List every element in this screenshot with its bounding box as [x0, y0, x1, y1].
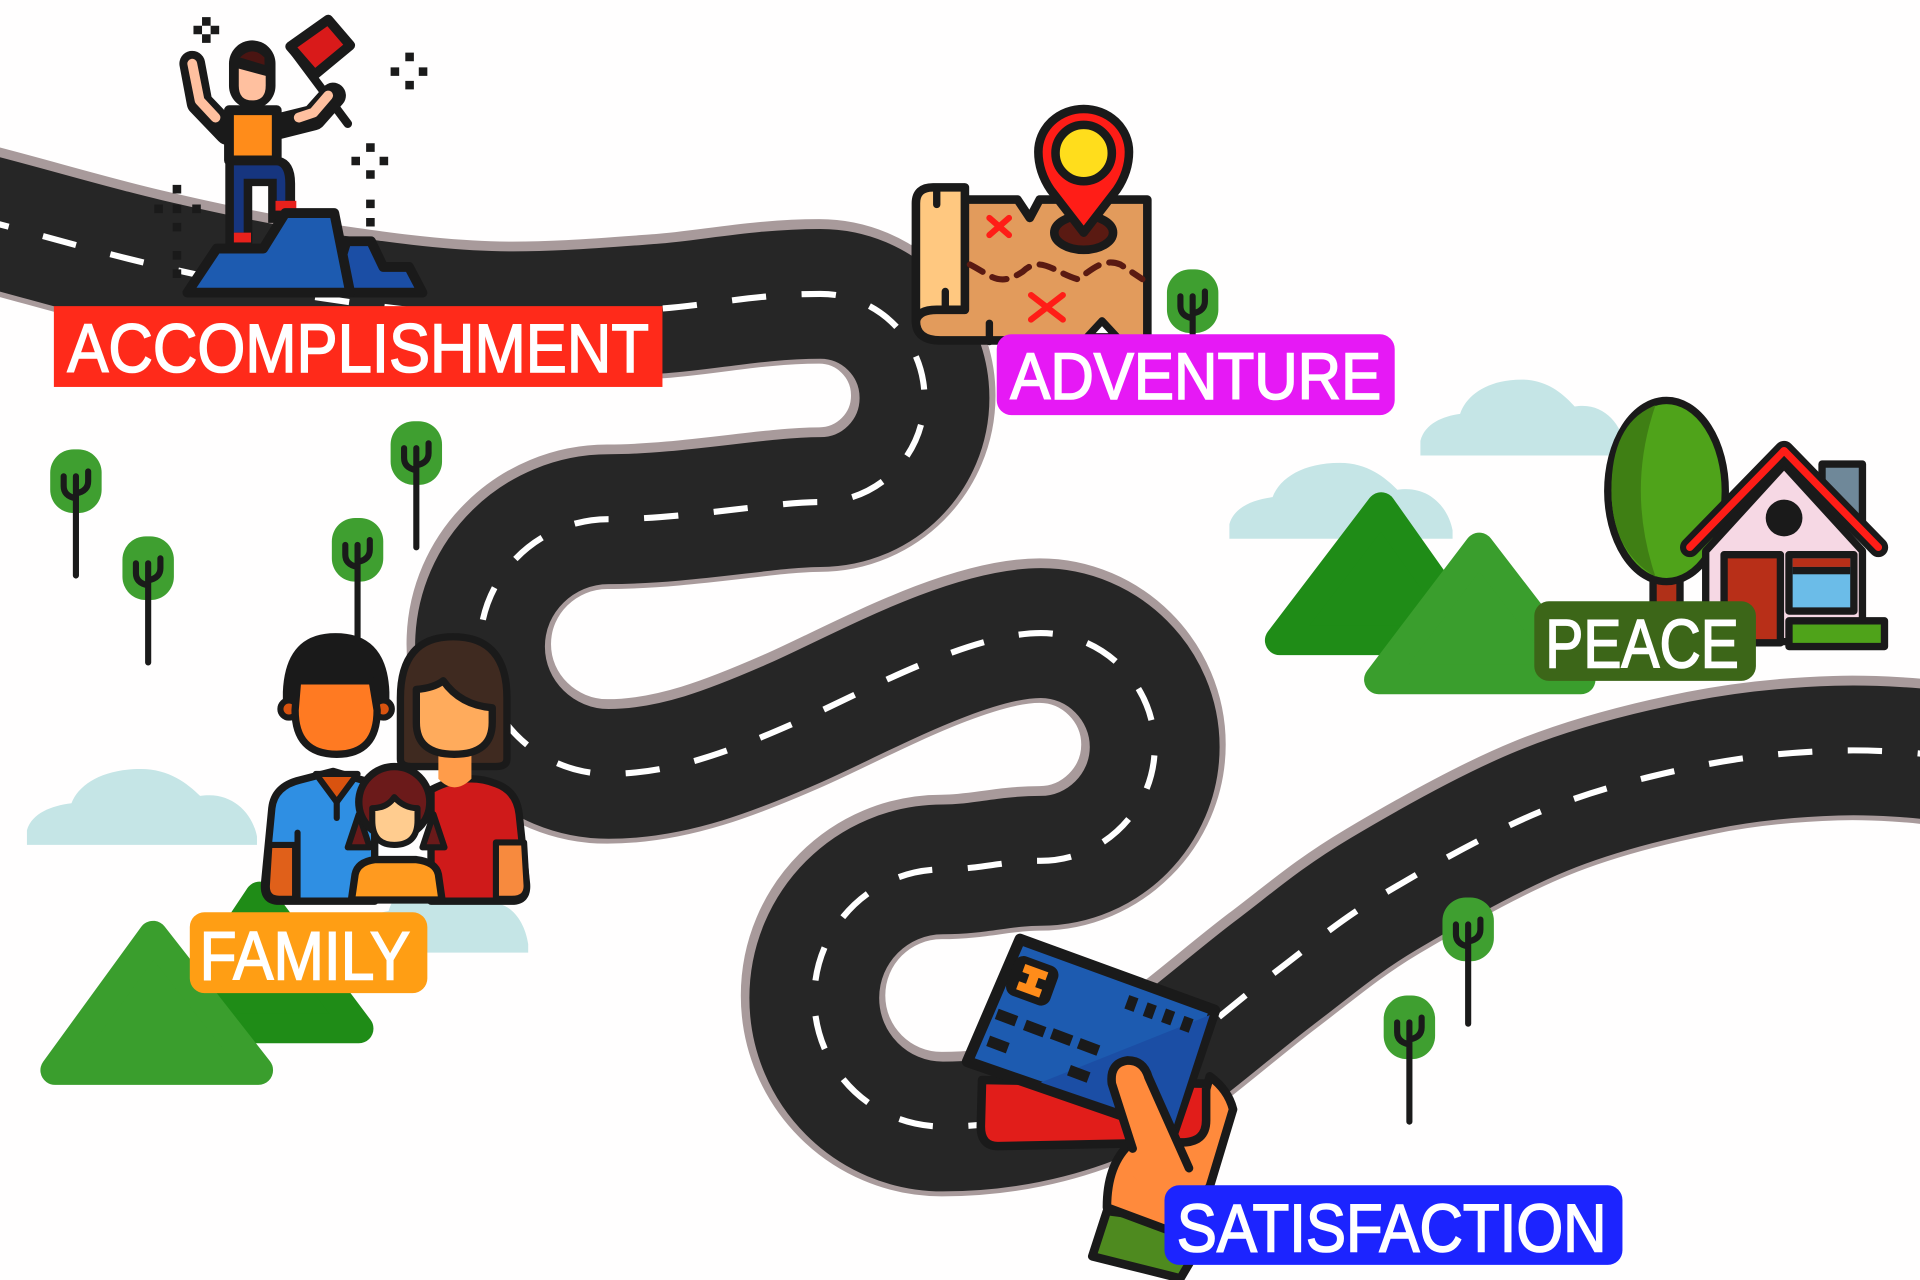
cloud left	[27, 769, 257, 845]
thumb fill	[1112, 1060, 1189, 1206]
flag	[290, 47, 348, 124]
pin base	[1054, 216, 1113, 250]
father collar	[316, 774, 358, 802]
bottom triangle	[1087, 321, 1117, 337]
icon: family of three	[264, 633, 527, 901]
tree 6	[1442, 898, 1494, 1024]
crosses	[989, 218, 1063, 320]
tree 5	[1167, 269, 1218, 396]
tree crown	[1608, 400, 1725, 582]
mountains left	[55, 896, 359, 1070]
dashed trail	[970, 262, 1142, 279]
head	[229, 40, 276, 109]
girl pigtails	[348, 814, 444, 847]
father placket	[334, 802, 339, 818]
legs	[225, 157, 304, 245]
roof	[1690, 451, 1878, 547]
label: adventure: ADVENTURE	[1010, 340, 1381, 414]
blue card	[967, 939, 1215, 1133]
father face	[295, 681, 377, 754]
window	[1789, 555, 1854, 611]
red card	[981, 1080, 1206, 1146]
tree 1	[50, 449, 102, 576]
scroll	[916, 187, 965, 321]
girl hair	[359, 767, 430, 838]
tree 3	[391, 421, 442, 547]
mother hair	[400, 637, 507, 767]
father body	[264, 771, 375, 901]
door	[1724, 555, 1780, 643]
torso	[229, 110, 277, 160]
card digits	[988, 1014, 1098, 1078]
mother body	[431, 779, 527, 901]
thumb outline	[1112, 1060, 1189, 1168]
tree 7	[1384, 996, 1435, 1122]
cloud behind right mountains	[1229, 463, 1453, 539]
tree 4	[332, 518, 383, 644]
tree trunk	[1653, 576, 1680, 607]
label: peace: PEACE	[1545, 605, 1739, 682]
card number blocks	[1129, 997, 1189, 1031]
map sheet	[916, 200, 1147, 340]
scroll ticks	[937, 190, 989, 342]
palm	[1107, 1076, 1233, 1231]
attic window	[1766, 500, 1802, 536]
mother face	[416, 681, 492, 754]
label: accomplishment: ACCOMPLISHMENT	[67, 310, 649, 387]
card shade	[1041, 1015, 1210, 1128]
arms	[192, 64, 333, 132]
icon: house with tree	[1608, 400, 1884, 647]
father sleeve line	[295, 833, 300, 899]
icon: hand holding bank cards	[967, 939, 1233, 1278]
icon: treasure map and location pin	[916, 109, 1147, 342]
father hair	[283, 633, 389, 710]
girl face	[372, 797, 418, 845]
mountains right	[1280, 507, 1581, 680]
icon: climber on summit with flag	[154, 17, 427, 293]
sparkles	[154, 17, 427, 278]
road	[0, 216, 1920, 1127]
girl body	[351, 860, 442, 900]
chimney	[1822, 464, 1862, 525]
sleeve	[1092, 1211, 1212, 1278]
label: family: FAMILY	[200, 918, 410, 995]
pin	[1038, 109, 1129, 233]
cloud behind family	[355, 877, 528, 953]
chip	[1003, 953, 1061, 1008]
tree 2	[122, 536, 174, 662]
wall	[1706, 465, 1862, 642]
cloud top right	[1420, 380, 1625, 456]
mother neck	[438, 753, 471, 787]
label: satisfaction: SATISFACTION	[1177, 1191, 1607, 1266]
rocks	[331, 241, 422, 293]
step	[1789, 621, 1884, 647]
